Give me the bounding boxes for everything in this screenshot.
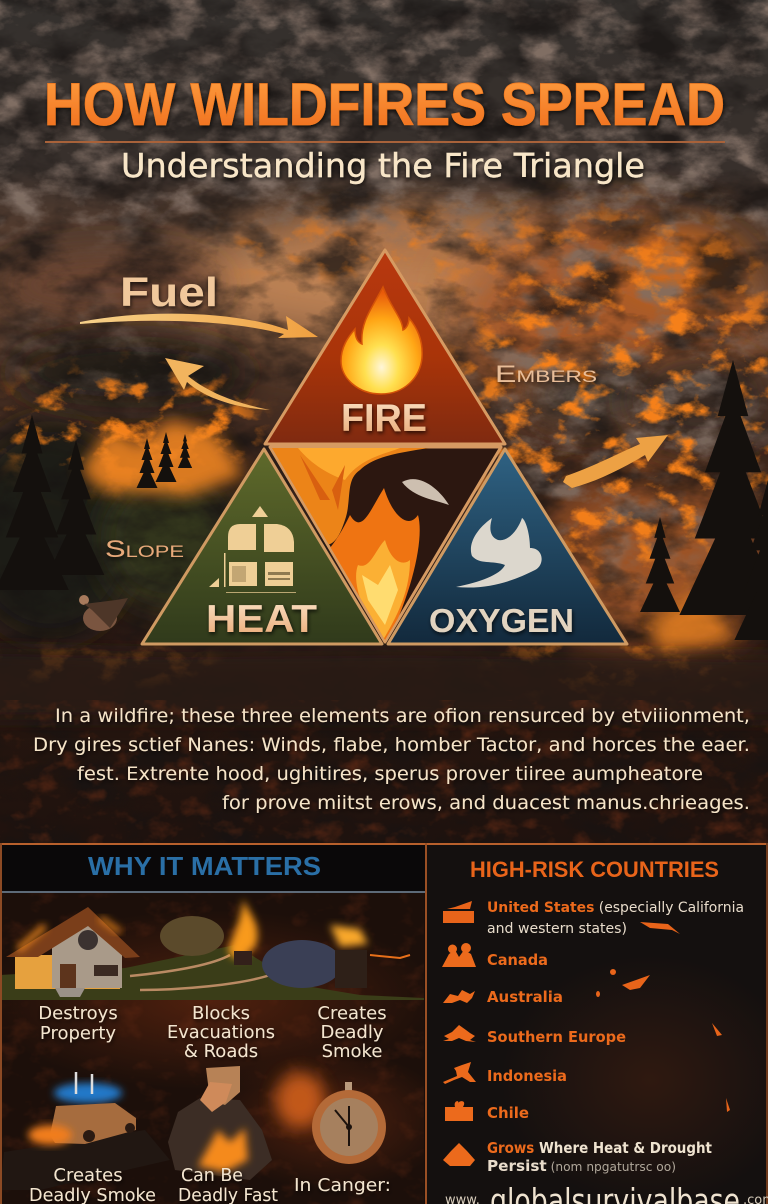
scene: burning house: [6, 907, 140, 997]
icon: flame: [341, 287, 422, 394]
icon: leaves: [443, 1025, 476, 1042]
icon: feather: [402, 479, 449, 505]
arrow: back toward left: [165, 358, 270, 410]
intro paragraph: for prove miitst erows, and duacest manus.chrieages.: [222, 792, 750, 814]
icon: animal: [443, 990, 475, 1003]
scene: winding road: [130, 955, 270, 990]
label: heat: HEAT: [206, 598, 317, 641]
item: chile: Chile: [487, 1104, 529, 1122]
icon: fire box: [443, 901, 474, 923]
text: impacts row one: Property: [40, 1023, 116, 1044]
item: australia: Australia: [487, 988, 563, 1006]
fire triangle diagram: [142, 250, 627, 650]
ember sparks: [596, 922, 730, 1112]
text: impacts row two: [29, 1165, 391, 1204]
label: fuel: Fuel: [120, 269, 218, 315]
item: grows where heat persists: Grows Where Heat & Drought: [487, 1139, 712, 1157]
text: impacts row one: Smoke: [322, 1041, 382, 1062]
text: impacts row one: [38, 1003, 387, 1062]
title divider: [45, 141, 725, 143]
item: grows where heat persists: [443, 1139, 712, 1175]
label: slope: Slope: [105, 536, 184, 563]
label: embers: Embers: [495, 361, 597, 388]
scene: man covering face: [168, 1066, 272, 1180]
scene: bush and tree fire: [160, 899, 410, 988]
text: impacts row one: Blocks: [192, 1003, 250, 1024]
panel: why it matters: [0, 843, 450, 1204]
icon: house blocks: [209, 506, 296, 593]
icon: box with heart: [445, 1101, 473, 1121]
icon: wind swirl: [456, 518, 542, 588]
panel: high-risk countries: [425, 843, 768, 1204]
label: fire: FIRE: [341, 397, 427, 440]
text: impacts row two: In Canger:: [294, 1175, 391, 1196]
central flame panel: [270, 447, 501, 650]
background: burning landscape: [0, 0, 768, 844]
tree silhouettes left: [0, 415, 192, 590]
item: southern europe: [443, 1025, 626, 1046]
scene: burning car: [0, 1072, 170, 1190]
item: canada: [442, 943, 548, 969]
icon: eye triangle: [443, 1143, 475, 1166]
heading: HIGH-RISK COUNTRIES: [470, 857, 719, 882]
label: oxygen: OXYGEN: [429, 602, 574, 639]
triangle: heat: [142, 449, 382, 644]
item: indonesia: Indonesia: [487, 1067, 567, 1085]
item: grows where heat persists: Persist (nom npgatutrsc oo): [487, 1157, 676, 1175]
text: impacts row one: Creates: [317, 1003, 387, 1024]
text: impacts row two: Can Be: [181, 1165, 243, 1186]
subtitle: Understanding the Fire Triangle: [121, 146, 645, 185]
scene: embers behind clock: [275, 1072, 325, 1128]
arrow: fuel toward fire: [80, 314, 318, 338]
intro paragraph: fest. Extrente hood, ughitires, sperus prover tiiree aumpheatore: [77, 763, 703, 785]
item: southern europe: Southern Europe: [487, 1028, 626, 1046]
text: impacts row one: Evacuations: [167, 1022, 275, 1043]
icon: stopwatch: [312, 1082, 386, 1164]
icon: running figure: [443, 1062, 476, 1084]
intro paragraph: [33, 705, 750, 814]
item: chile: [445, 1101, 529, 1122]
heading: WHY IT MATTERS: [88, 851, 321, 881]
item: australia: [443, 988, 563, 1006]
text: impacts row one: & Roads: [184, 1041, 258, 1062]
item: united states: United States (especially California: [487, 900, 744, 916]
panel backdrop glow: [0, 893, 450, 1204]
intro paragraph: In a wildfire; these three elements are ofion rensurced by etviiionment,: [55, 705, 750, 727]
item: united states: [443, 900, 744, 937]
triangle: fire: [265, 250, 505, 444]
item: canada: Canada: [487, 951, 548, 969]
intro paragraph: Dry gires sctief Nanes: Winds, flabe, homber Tactor, and horces the eaer.: [33, 734, 750, 756]
text: impacts row one: Deadly: [320, 1022, 384, 1043]
arrow: embers outward: [563, 435, 668, 488]
text: impacts row one: Destroys: [38, 1003, 118, 1024]
item: united states: and western states): [487, 921, 627, 937]
tree silhouettes right: [640, 360, 768, 640]
scene: green hill: [0, 945, 425, 1000]
small bird near slope: [79, 595, 128, 631]
icon: people: [442, 943, 476, 967]
item: indonesia: [443, 1062, 567, 1085]
text: impacts row two: Creates: [53, 1165, 123, 1186]
triangle: oxygen: [388, 449, 627, 644]
